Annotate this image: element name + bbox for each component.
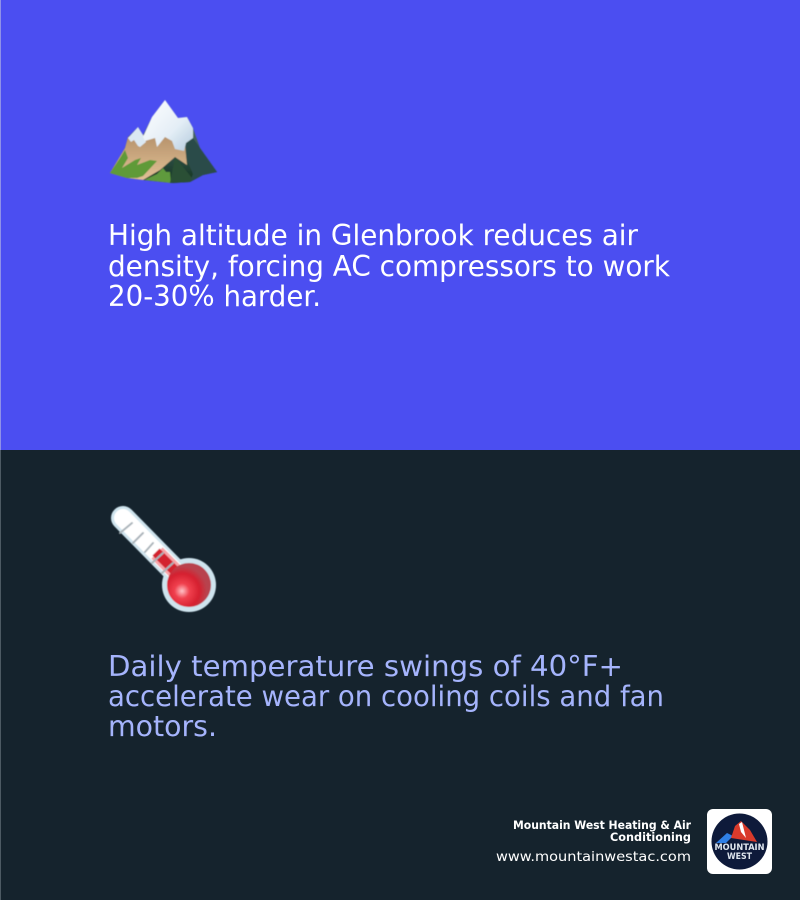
- text: temperature statement: motors.: [108, 710, 217, 743]
- logo: [707, 809, 772, 874]
- text: altitude statement: [108, 219, 670, 313]
- icon: mountain: [110, 100, 217, 183]
- text: temperature statement: Daily temperature swings of 40°F+: [108, 650, 623, 683]
- text: company name: Conditioning: [610, 830, 691, 844]
- text: company name: [513, 818, 691, 844]
- text: altitude statement: 20-30% harder.: [108, 280, 321, 313]
- text: altitude statement: High altitude in Glenbrook reduces air: [108, 219, 638, 252]
- logo wordmark: WEST: [727, 852, 752, 862]
- text: altitude statement: density, forcing AC compressors to work: [108, 250, 670, 283]
- text: temperature statement: [108, 650, 664, 743]
- icon: thermometer: [120, 518, 216, 612]
- panel: altitude: [0, 0, 800, 450]
- footer: company branding: [496, 809, 772, 874]
- text: temperature statement: accelerate wear on cooling coils and fan: [108, 680, 664, 713]
- panel: temperature: [0, 450, 800, 900]
- text: website: www.mountainwestac.com: [496, 849, 691, 865]
- logo wordmark: [714, 843, 764, 862]
- text: company name: Mountain West Heating & Air: [513, 818, 691, 832]
- logo wordmark: MOUNTAIN: [714, 843, 764, 853]
